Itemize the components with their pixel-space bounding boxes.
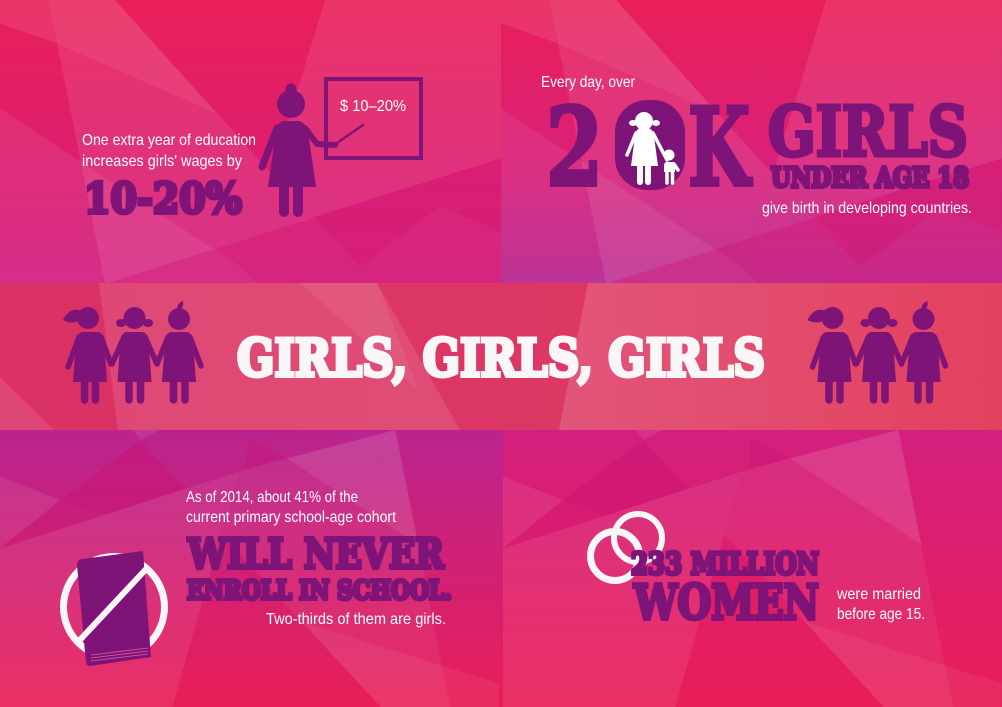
text: were married before age 15: were married xyxy=(836,586,921,603)
girl with tuft xyxy=(157,301,201,400)
stat: under age 18: UNDER AGE 18 xyxy=(771,163,969,194)
icon: three girls right xyxy=(808,301,946,400)
icon: teacher at blackboard: $ 10–20% xyxy=(340,98,406,115)
panel: school enrolment xyxy=(0,430,503,707)
text: one extra year of education: increases girls' wages by xyxy=(82,153,242,170)
text: as of 2014: As of 2014, about 41% of the xyxy=(186,489,358,506)
heading: enroll in school: ENROLL IN SCHOOL. xyxy=(187,576,452,606)
text: one extra year of education xyxy=(82,132,256,170)
text: give birth: give birth in developing countries. xyxy=(762,200,972,217)
band background xyxy=(0,283,1002,430)
icon: crossed-out book xyxy=(64,551,164,666)
girl with ponytail xyxy=(63,307,111,400)
panel background: bottom right xyxy=(503,430,1002,707)
girl with pigtails xyxy=(112,307,157,400)
stat: 20K xyxy=(546,85,753,211)
text: every day, over: Every day, over xyxy=(541,74,636,91)
text: one extra year of education: One extra year of education xyxy=(82,132,256,149)
icon: three girls left xyxy=(63,301,201,400)
text: as of 2014 xyxy=(186,489,396,526)
panel background: top right xyxy=(501,0,1002,283)
panel: teen births xyxy=(501,0,1002,283)
text: were married before age 15: before age 15. xyxy=(837,606,925,623)
stat: women: WOMEN xyxy=(633,575,819,631)
stat: 20K: 2 xyxy=(546,85,603,211)
panel: title band xyxy=(0,283,1002,430)
icon: girl with child xyxy=(627,112,678,183)
text: two-thirds: Two-thirds of them are girls. xyxy=(266,611,446,628)
stat: 233 million: 233 MILLION xyxy=(631,547,819,582)
panel: child marriage xyxy=(503,430,1002,707)
panel background: bottom left xyxy=(0,430,503,707)
panel: education and wages xyxy=(0,0,501,283)
stat: 20K: K xyxy=(688,85,753,211)
text: as of 2014: current primary school-age cohort xyxy=(186,509,396,526)
panel background: top left xyxy=(0,0,501,283)
stat: 20K: 0 xyxy=(620,85,680,211)
icon: wedding rings xyxy=(590,514,662,580)
stat: 10-20%: 10-20% xyxy=(84,174,242,223)
icon: teacher at blackboard xyxy=(262,79,421,212)
title: GIRLS, GIRLS, GIRLS xyxy=(237,329,765,389)
text: were married before age 15 xyxy=(836,586,925,623)
heading: will never: WILL NEVER xyxy=(187,530,445,578)
